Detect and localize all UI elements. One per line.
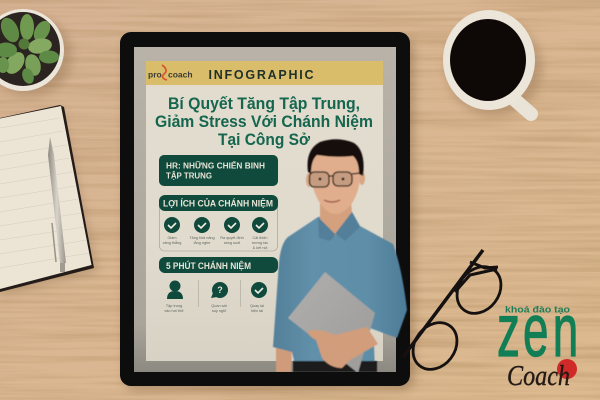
header title: INFOGRAPHIC [208, 68, 314, 82]
eyeglasses [310, 172, 360, 187]
belt [293, 361, 377, 372]
HR banner: TẬP TRUNG [166, 172, 212, 180]
eyeglasses on desk [403, 250, 510, 378]
header band [146, 61, 383, 85]
hair [308, 139, 364, 176]
laptop [288, 272, 375, 373]
main title [155, 95, 373, 149]
benefit icons [164, 217, 268, 233]
benefit labels: sáng suốt [224, 241, 241, 245]
silver pen [48, 137, 66, 272]
benefit labels: & kết nối [253, 246, 268, 250]
tablet screen [134, 47, 396, 372]
forearm left [276, 345, 292, 372]
main title: Giảm Stress Với Chánh Niệm [155, 113, 373, 131]
brand: zen coach: zen [497, 290, 578, 373]
benefit labels: Ra quyết định [220, 236, 244, 240]
five minute heading [159, 257, 278, 273]
eyes and smile [319, 178, 344, 202]
benefit labels: Cải thiện [252, 236, 268, 240]
icon: question bubble [211, 282, 228, 298]
icon: check circle [251, 282, 267, 298]
red seal [557, 359, 577, 379]
neck [320, 200, 352, 236]
tablet [120, 32, 414, 390]
main title: Tại Công Sở [218, 131, 310, 149]
step labels: suy nghĩ [212, 309, 227, 313]
benefit labels: Giảm [167, 236, 177, 240]
benefit labels: lắng nghe [194, 240, 210, 245]
coffee cup [443, 10, 542, 116]
brand logo [148, 65, 193, 80]
presenter photo [273, 139, 407, 373]
step labels [164, 304, 264, 313]
brand: zen coach: khoá đào tạo [505, 304, 571, 314]
step labels: vào hơi thở [164, 309, 184, 313]
benefit labels: Tăng khả năng [189, 236, 215, 240]
benefit labels: tương tác [252, 241, 268, 245]
step labels: hiện tại [251, 309, 263, 313]
potted succulent [0, 9, 72, 97]
shirt [273, 212, 407, 372]
ears [306, 171, 365, 187]
five minute heading: 5 PHÚT CHÁNH NIỆM [166, 260, 251, 271]
step labels: Tập trung [166, 304, 182, 308]
brand: zen coach: Coach [507, 361, 570, 392]
step labels: Quan sát [211, 304, 228, 308]
benefits heading: LỢI ÍCH CỦA CHÁNH NIỆM [163, 198, 273, 208]
HR banner [159, 155, 278, 186]
HR banner: HR: NHỮNG CHIẾN BINH [166, 160, 265, 170]
panel: benefits [159, 195, 278, 251]
collar [318, 212, 360, 241]
hand and forearm [308, 327, 378, 368]
infographic page [146, 61, 383, 361]
brand logo: coach [168, 70, 193, 80]
notebook with pen [0, 105, 98, 296]
face [310, 148, 361, 214]
benefit labels: căng thẳng [163, 240, 181, 245]
brand logo: pro [148, 70, 162, 80]
icon: person [167, 280, 183, 299]
benefit labels [163, 236, 268, 250]
icon: question bubble: ? [217, 285, 223, 295]
step labels: Quay lại [250, 304, 264, 308]
main title: Bí Quyết Tăng Tập Trung, [168, 95, 360, 113]
